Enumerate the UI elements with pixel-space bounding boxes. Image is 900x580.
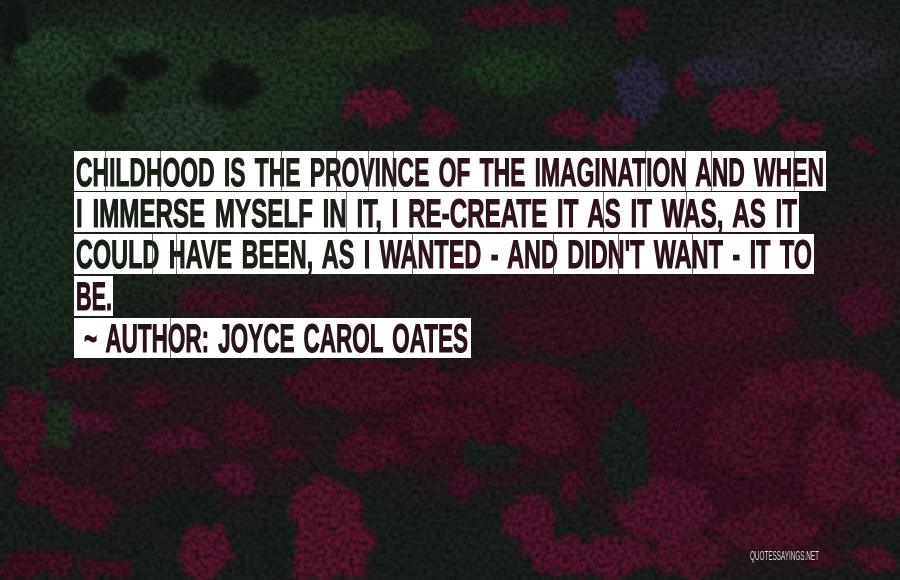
dark gaps between leaves: [117, 51, 173, 79]
lower-right flower clusters: [460, 363, 580, 407]
quote line 4: [74, 275, 113, 319]
author attribution: [74, 317, 471, 361]
lower-left flower clusters: [0, 388, 46, 472]
author attribution: ~ AUTHOR: JOYCE CAROL OATES: [84, 317, 468, 361]
mid-height flower clusters behind and around the quote: [180, 288, 260, 312]
upper red flower clusters: [343, 87, 407, 123]
bright leaves: [12, 30, 88, 80]
quote line 4: BE.: [76, 275, 112, 319]
dark green grass gaps: [600, 400, 650, 500]
purple lupins: [615, 58, 665, 122]
quote text block: [74, 151, 826, 319]
infographic canvas: QUOTESSAYINGS.NET: [750, 548, 819, 563]
